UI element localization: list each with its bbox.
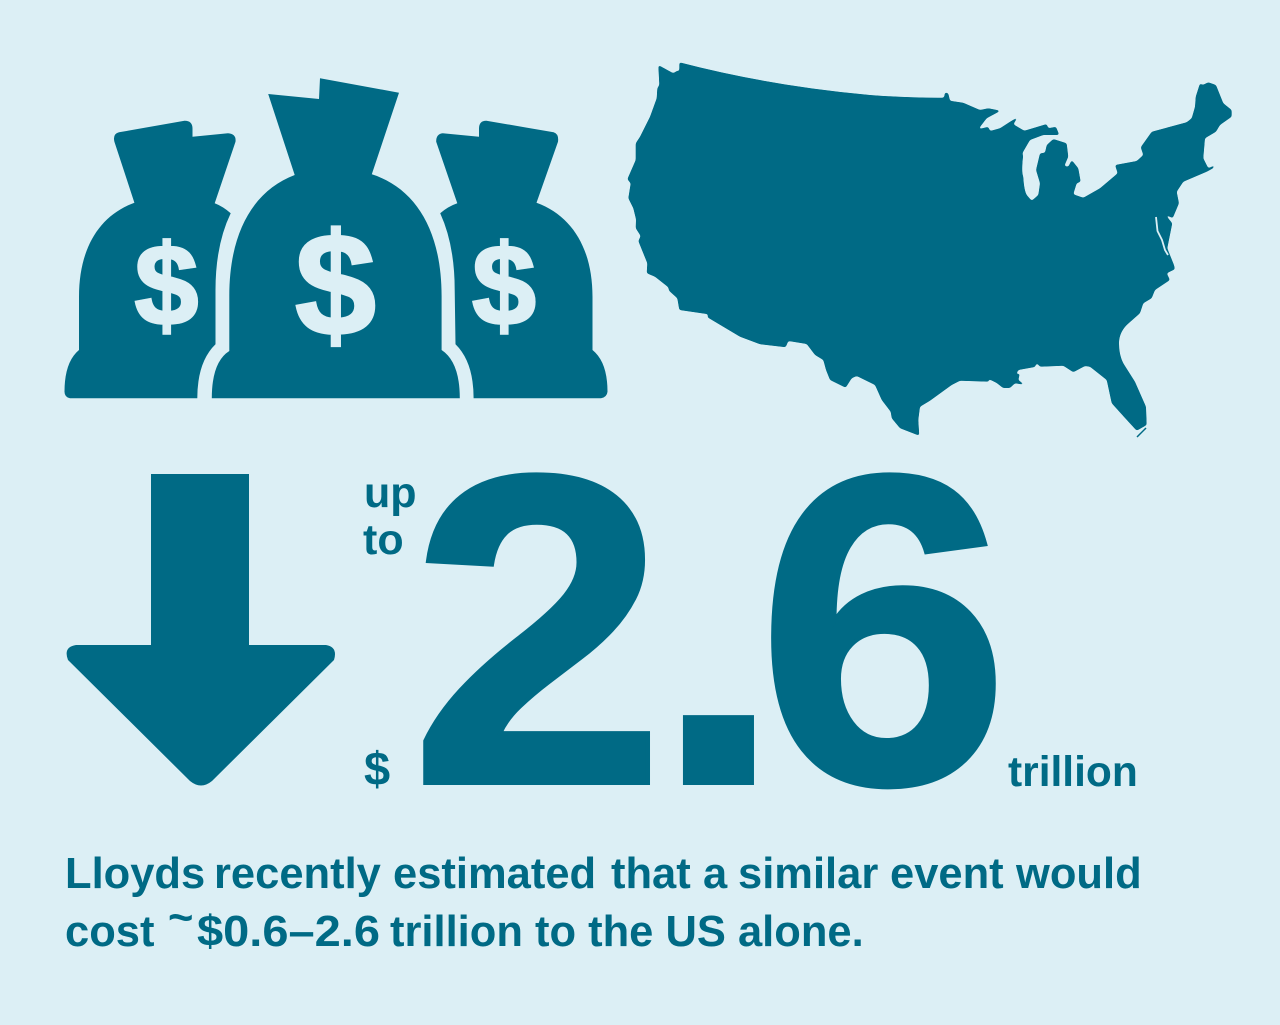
map detail: Chesapeake Bay (1156, 217, 1168, 255)
map: contiguous United States (627, 62, 1232, 437)
arrow: downward (67, 474, 335, 786)
headline number: 2.6: 6 (756, 383, 1010, 877)
headline number: 2.6 (409, 383, 1010, 877)
label: up to (363, 469, 417, 564)
icon: left money bag: $ (135, 222, 198, 350)
headline number: 2.6: 2 (409, 383, 666, 877)
map detail: Florida Keys (1137, 428, 1146, 437)
caption text: Lloyds (65, 850, 205, 898)
caption text (65, 850, 1142, 956)
caption text: recently (214, 850, 381, 898)
caption text: a (703, 850, 728, 898)
caption text: would (1015, 850, 1142, 898)
caption text: ~ (168, 894, 193, 942)
caption text: event (890, 850, 1004, 898)
caption text: $0.6–2.6 (197, 908, 380, 956)
icon: three money bags (64, 78, 608, 398)
icon: centre money bag (212, 78, 460, 398)
label: up to: to (363, 516, 404, 564)
icon: centre money bag: $ (295, 203, 376, 366)
caption text: that (611, 850, 691, 898)
caption text: estimated (393, 850, 596, 898)
label: trillion: trillion (1008, 749, 1138, 796)
label: up to: up (364, 469, 417, 517)
caption text: trillion to the US alone. (390, 908, 864, 956)
label: dollar sign: $ (364, 742, 390, 795)
headline number: 2.6: . (653, 383, 784, 877)
caption text: cost (65, 908, 154, 956)
icon: left money bag (64, 121, 236, 398)
caption text: similar (738, 850, 878, 898)
icon: right money bag: $ (472, 222, 536, 350)
icon: right money bag (436, 121, 608, 398)
